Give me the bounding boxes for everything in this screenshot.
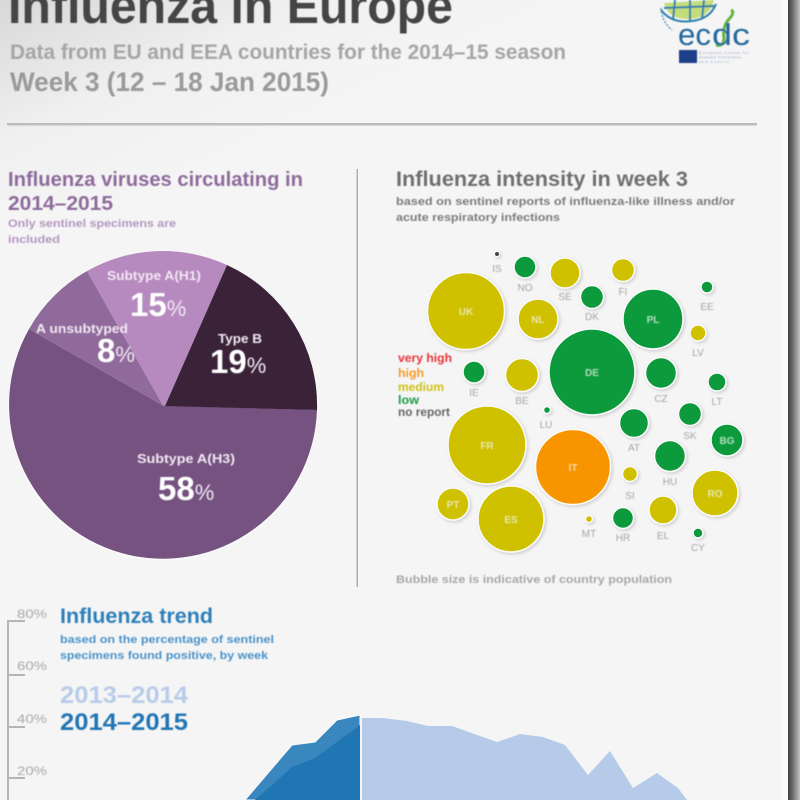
legend — [398, 351, 452, 419]
country codes — [447, 264, 735, 554]
country codes: AT — [628, 443, 640, 454]
axis — [8, 607, 47, 800]
country codes: BE — [515, 396, 529, 407]
subtitle: Data from EU and EEA countries for the 2014–15 season — [10, 41, 566, 64]
note: sentinel specimens: Only sentinel specimens are — [8, 218, 176, 230]
slice: Subtype A(H1) — [87, 251, 227, 406]
area: 2014-2015 upper — [245, 715, 360, 800]
legend: seasons — [60, 682, 189, 736]
country codes: LU — [540, 420, 552, 431]
country codes: CZ — [654, 394, 668, 405]
panel: trend — [8, 605, 687, 800]
logo: ecdc: European Centre for — [699, 50, 750, 55]
country codes: IT — [569, 463, 577, 474]
logo: ecdc: Disease Prevention — [699, 54, 741, 60]
note: intensity basis: acute respiratory infections — [396, 212, 560, 224]
legend: high — [398, 366, 424, 380]
heading: viruses: 2014–2015 — [8, 193, 113, 215]
panel: viruses circulating — [8, 169, 318, 560]
pie labels: 15% — [130, 286, 186, 323]
pie labels: A unsubtyped — [36, 321, 128, 336]
legend: very high — [398, 351, 452, 365]
panel: intensity — [396, 168, 743, 586]
slice: A unsubtyped — [29, 271, 163, 406]
heading: intensity: Influenza intensity in week 3 — [396, 168, 688, 191]
axis: 60% — [17, 659, 47, 673]
pie labels: Subtype A(H3) — [137, 451, 235, 466]
logo: ecdc: dc — [712, 17, 750, 52]
country codes: SK — [683, 431, 697, 442]
legend: medium — [398, 380, 444, 394]
bubble chart — [428, 252, 743, 554]
pie labels: 19% — [210, 343, 266, 380]
note: sentinel specimens: included — [8, 234, 60, 246]
country codes: BG — [720, 436, 735, 447]
country codes: SI — [625, 491, 635, 502]
country codes: NO — [518, 283, 533, 294]
country codes: IS — [492, 264, 502, 275]
note: trend basis: based on the percentage of sentinel — [60, 634, 274, 646]
country codes: DK — [585, 312, 599, 323]
country codes: PL — [647, 315, 659, 326]
note: trend basis — [60, 634, 274, 662]
country codes: UK — [459, 307, 474, 318]
country codes: HR — [616, 533, 630, 544]
pie labels — [36, 268, 266, 507]
country codes: FR — [480, 441, 494, 452]
note: sentinel specimens — [8, 218, 176, 246]
note: trend basis: specimens found positive, by week — [60, 650, 269, 662]
high bubble: Italy — [536, 430, 610, 504]
area: 2014-2015 lower — [255, 725, 360, 800]
axis: 80% — [17, 607, 47, 621]
pie labels: Type B — [218, 331, 262, 346]
heading: trend: Influenza trend — [60, 605, 213, 628]
country codes: MT — [582, 529, 596, 540]
note: intensity basis: based on sentinel reports of influenza-like illness and/or — [396, 196, 736, 208]
medium bubbles — [428, 258, 738, 552]
pie labels: 58% — [158, 470, 214, 507]
legend: seasons: 2014–2015 — [60, 709, 188, 736]
country codes: NL — [531, 315, 545, 326]
heading: viruses: Influenza viruses circulating in — [8, 169, 303, 191]
header block — [8, 0, 566, 97]
country codes: LV — [692, 348, 704, 359]
pie labels: 8% — [97, 332, 135, 369]
country codes: SE — [558, 292, 572, 303]
logo: ecdc: and Control — [699, 59, 729, 64]
note: bubble size: Bubble size is indicative of country population — [396, 574, 672, 586]
country codes: EE — [700, 302, 714, 313]
low bubbles — [463, 256, 743, 538]
legend: low — [398, 393, 420, 407]
legend: no report — [398, 405, 450, 419]
pie labels: Subtype A(H1) — [107, 268, 201, 283]
pie chart — [8, 250, 318, 560]
legend: seasons: 2013–2014 — [60, 682, 189, 709]
note: intensity basis — [396, 196, 736, 224]
country codes: ES — [504, 515, 518, 526]
country codes: EL — [657, 531, 670, 542]
heading: viruses — [8, 169, 303, 215]
country codes: LT — [712, 397, 722, 408]
country codes: IE — [469, 388, 479, 399]
week label: Week 3 (12 – 18 Jan 2015) — [10, 67, 329, 97]
axis: 40% — [17, 712, 47, 726]
country codes: CY — [691, 543, 705, 554]
slice: Type B — [165, 265, 317, 410]
slice: Subtype A(H3) — [9, 329, 317, 559]
country codes: PT — [447, 500, 459, 511]
area: 2013-2014 — [362, 718, 687, 800]
axis: 20% — [17, 764, 47, 778]
logo: ecdc — [661, 0, 750, 64]
country codes: RO — [708, 489, 723, 500]
country codes: HU — [663, 477, 677, 488]
country codes: DE — [585, 368, 599, 379]
logo: ecdc: ec — [678, 17, 711, 52]
country codes: FI — [619, 287, 627, 298]
no report bubble: Iceland — [494, 252, 500, 256]
area chart — [245, 715, 687, 800]
